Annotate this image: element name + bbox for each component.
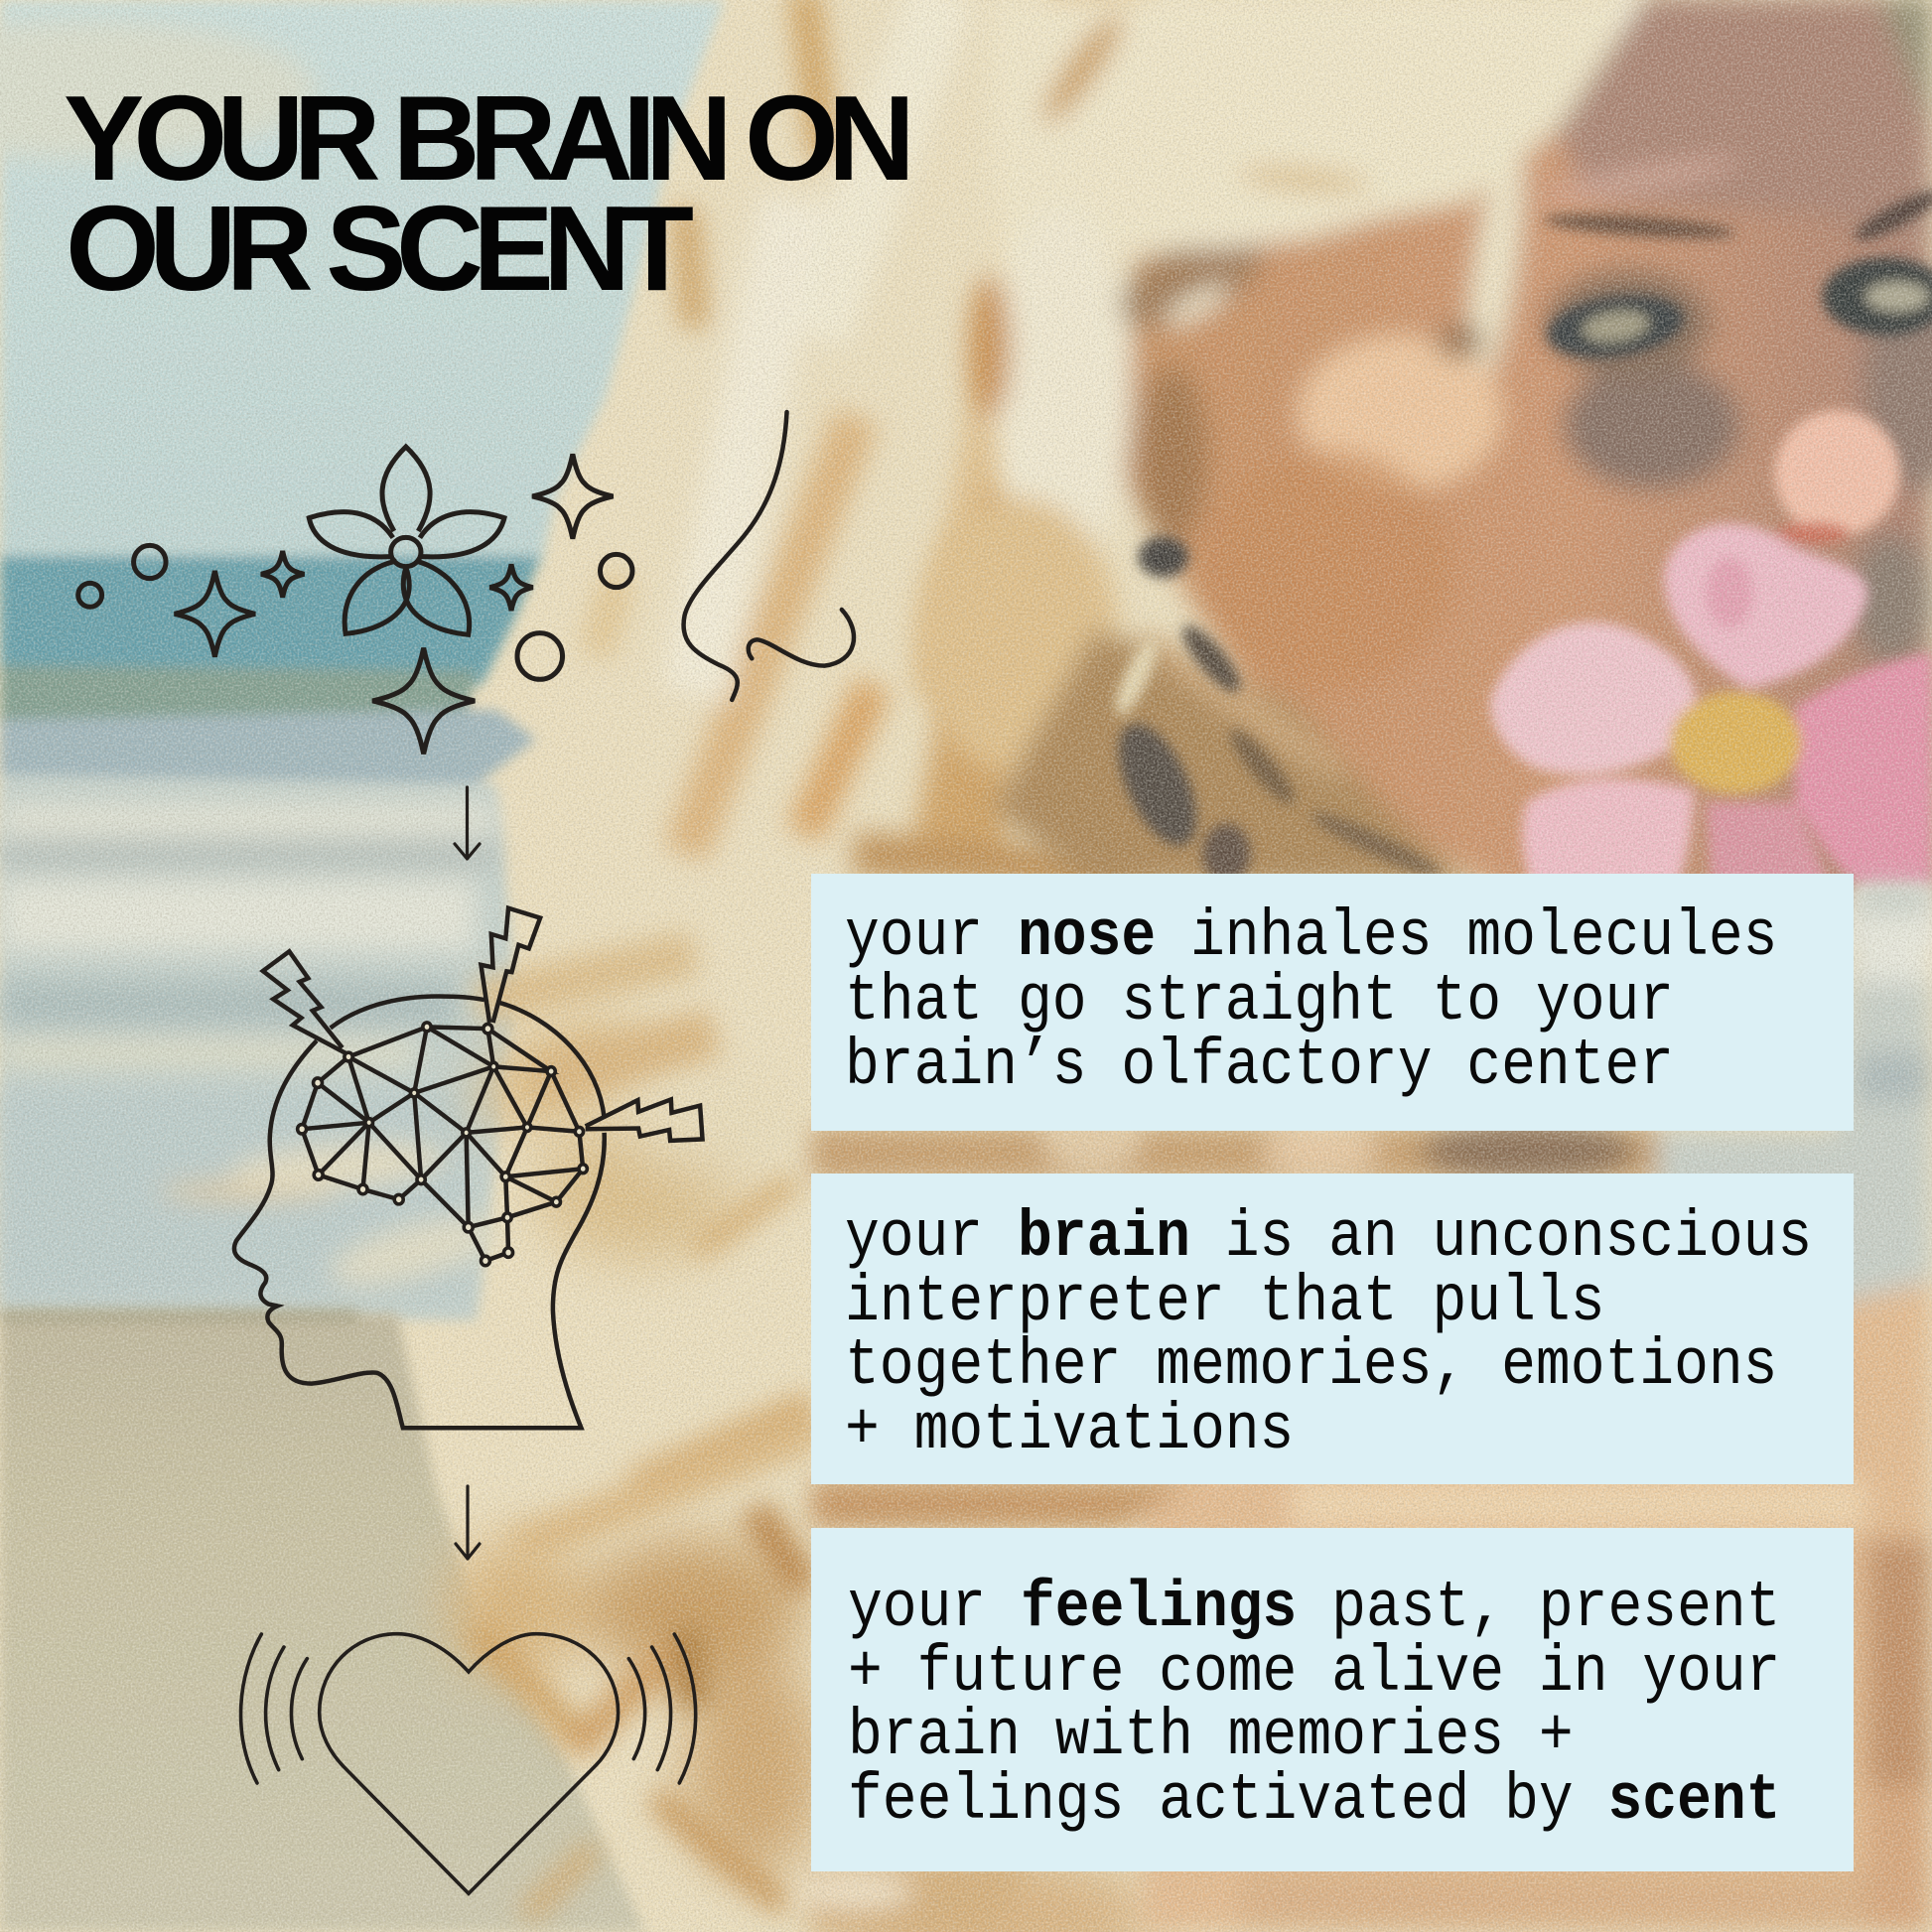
hair and shoulders bbox=[447, 999, 1162, 1932]
title: OUR SCENT bbox=[66, 181, 694, 316]
panel: nose: brain’s olfactory center bbox=[845, 1029, 1674, 1103]
icon: flower with sparkles and scent molecules bbox=[78, 447, 632, 754]
arrow: nose to brain bbox=[455, 787, 480, 859]
panel: nose: your nose inhales molecules bbox=[845, 899, 1777, 974]
panel: feelings bbox=[811, 1528, 1854, 1871]
icon: nose profile bbox=[684, 412, 854, 700]
panel: brain bbox=[811, 1173, 1854, 1484]
panel: nose bbox=[811, 874, 1854, 1131]
right edge beyond boxes bbox=[794, 884, 1932, 1932]
panel: feelings: feelings activated by scent bbox=[848, 1763, 1780, 1838]
panel: brain: together memories, emotions bbox=[845, 1328, 1777, 1403]
panel: feelings: + future come alive in your bbox=[848, 1635, 1780, 1710]
panel: nose: that go straight to your bbox=[845, 964, 1674, 1038]
panel: brain: + motivations bbox=[845, 1393, 1294, 1467]
panel: brain: interpreter that pulls bbox=[845, 1265, 1604, 1339]
title bbox=[64, 70, 915, 316]
icon: head with brain network and lightning bolts bbox=[234, 908, 703, 1428]
title: YOUR BRAIN ON bbox=[64, 70, 915, 206]
face and neck, drawn in a scaled group bbox=[915, 0, 1932, 898]
panel: feelings: your feelings past, present bbox=[848, 1571, 1780, 1645]
panel: feelings: brain with memories + bbox=[848, 1699, 1574, 1773]
flower bbox=[1664, 523, 1867, 689]
panel: brain: your brain is an unconscious bbox=[845, 1200, 1812, 1275]
arrow: brain to heart bbox=[456, 1486, 480, 1559]
icon: vibrating heart bbox=[241, 1634, 696, 1893]
